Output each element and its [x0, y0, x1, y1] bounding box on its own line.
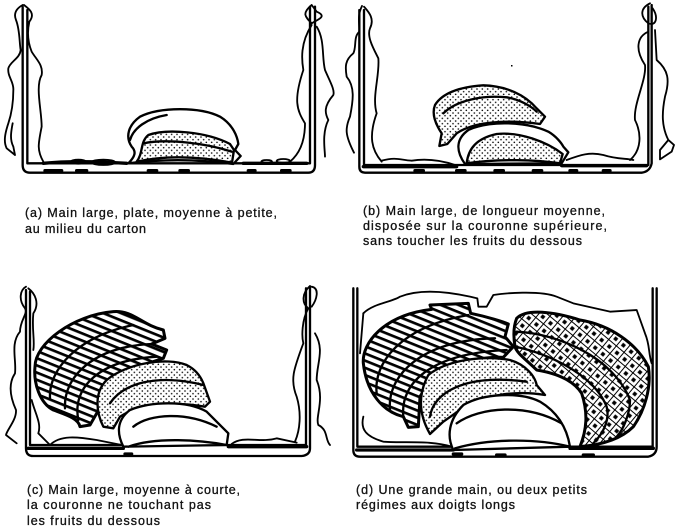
caption a — [25, 206, 277, 236]
caption d — [356, 483, 587, 512]
bananas d — [363, 303, 649, 450]
caption b — [363, 204, 607, 248]
caption c: (c) Main large, moyenne à courte, — [27, 483, 240, 497]
bananas c — [35, 312, 228, 447]
panel: (a) flat hand in the middle of the carton — [5, 5, 334, 236]
caption d: (d) Une grande main, ou deux petits — [356, 483, 587, 497]
caption c: les fruits du dessous — [27, 514, 160, 528]
caption b: (b) Main large, de longueur moyenne, — [363, 204, 605, 218]
caption c: la couronne ne touchant pas — [27, 498, 211, 512]
panel: (c) hand with crown not touching fruit below — [6, 286, 330, 528]
carton a — [5, 5, 334, 173]
bananas b — [434, 85, 568, 164]
caption c — [27, 483, 240, 528]
speck — [511, 65, 512, 66]
caption a: au milieu du carton — [25, 222, 146, 236]
bananas a — [128, 109, 241, 164]
caption b: disposée sur la couronne supérieure, — [363, 219, 607, 233]
caption a: (a) Main large, plate, moyenne à petite, — [25, 206, 277, 220]
panel: (d) one large hand or two small bunches — [353, 288, 657, 512]
carton c — [6, 286, 330, 456]
caption d: régimes aux doigts longs — [356, 498, 515, 512]
carton d — [353, 288, 657, 457]
panel: (b) hand placed on the upper crown — [346, 3, 674, 248]
caption b: sans toucher les fruits du dessous — [363, 234, 582, 248]
carton b — [346, 3, 674, 173]
